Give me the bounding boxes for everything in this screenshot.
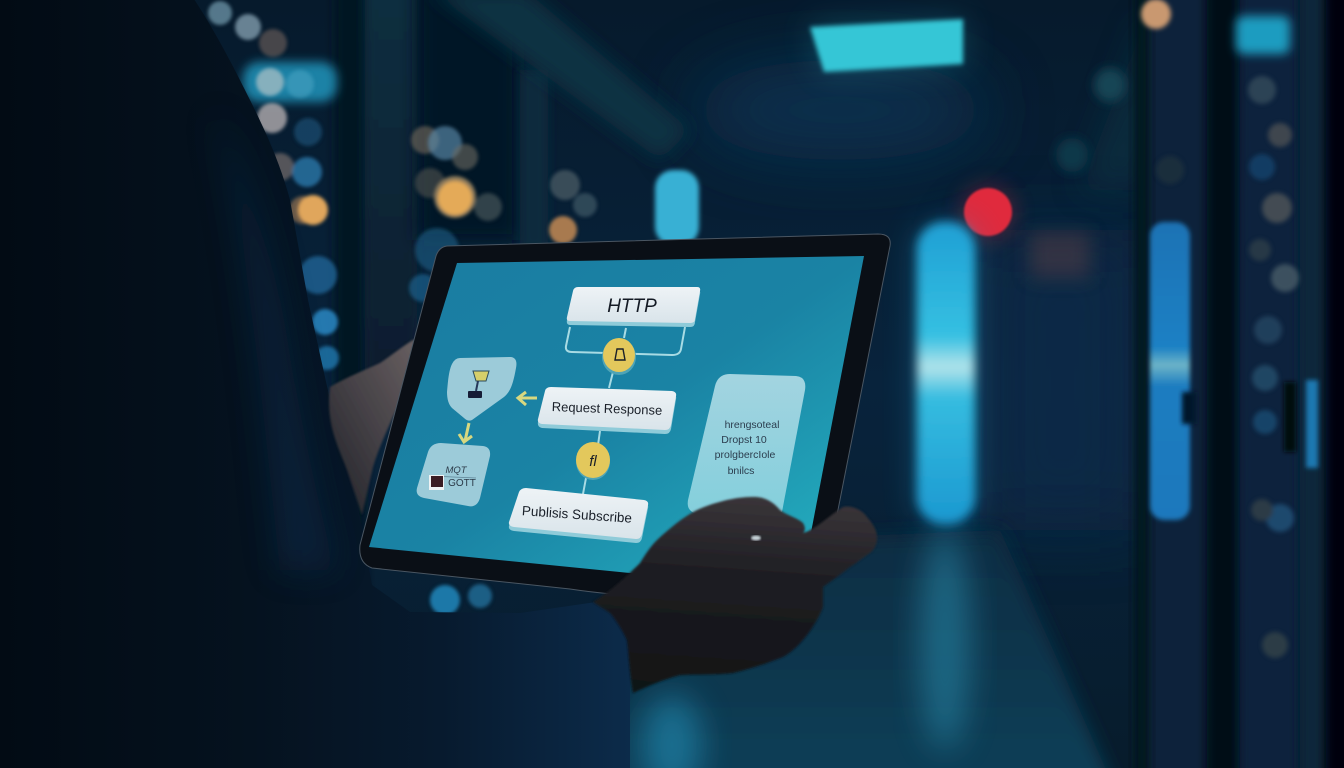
person's jacket and sleeve (0, 0, 630, 768)
left hand holding tablet (329, 340, 424, 515)
bokeh server lights: right racks (1156, 76, 1299, 658)
side note panel: Dropst 10 (721, 434, 767, 446)
tablet body (360, 234, 890, 594)
rack indicator: far right (1284, 380, 1318, 468)
shield panel with icon (447, 357, 516, 421)
box: MQTT-like label: GOTT (448, 478, 476, 489)
box: Request Response (538, 387, 676, 434)
tablet (360, 234, 890, 594)
box: Publish Subscribe (509, 488, 648, 543)
yellow arrow: down (459, 423, 472, 442)
small cyan panel top right (1236, 16, 1290, 54)
icon: cup over box (468, 371, 489, 398)
side note panel: bnilcs (728, 465, 754, 477)
orange light top right (1141, 0, 1171, 29)
box: Request Response: Request Response (552, 399, 663, 418)
box: MQTT-like label (417, 443, 490, 506)
blue light strip: centre (914, 220, 978, 526)
box: HTTP (567, 287, 700, 327)
yellow node: bottom: fl (589, 453, 597, 470)
icon: small thumbnail (429, 475, 444, 490)
bokeh server lights: left racks (208, 1, 597, 615)
blue light strip: small, behind tablet (655, 170, 699, 245)
yellow arrow: left (518, 392, 537, 405)
right hand on tablet (593, 497, 877, 693)
side note panel (688, 374, 805, 514)
tablet screen (369, 256, 864, 590)
box: HTTP: HTTP (607, 296, 657, 317)
box: MQTT-like label: MQT (445, 465, 468, 476)
side note panel: prolgbercIole (715, 449, 776, 461)
connector lines (566, 327, 685, 494)
red indicator light (958, 182, 1018, 242)
side note panel: hrengsoteal (725, 419, 779, 431)
floor reflection (600, 530, 1115, 768)
distant red glow (1030, 232, 1090, 278)
box: Publish Subscribe: Publisis Subscribe (521, 503, 633, 526)
ceiling light (808, 17, 965, 74)
yellow node: bottom (576, 442, 610, 480)
yellow node: top (602, 338, 636, 375)
blue light strip: right (1150, 222, 1196, 520)
